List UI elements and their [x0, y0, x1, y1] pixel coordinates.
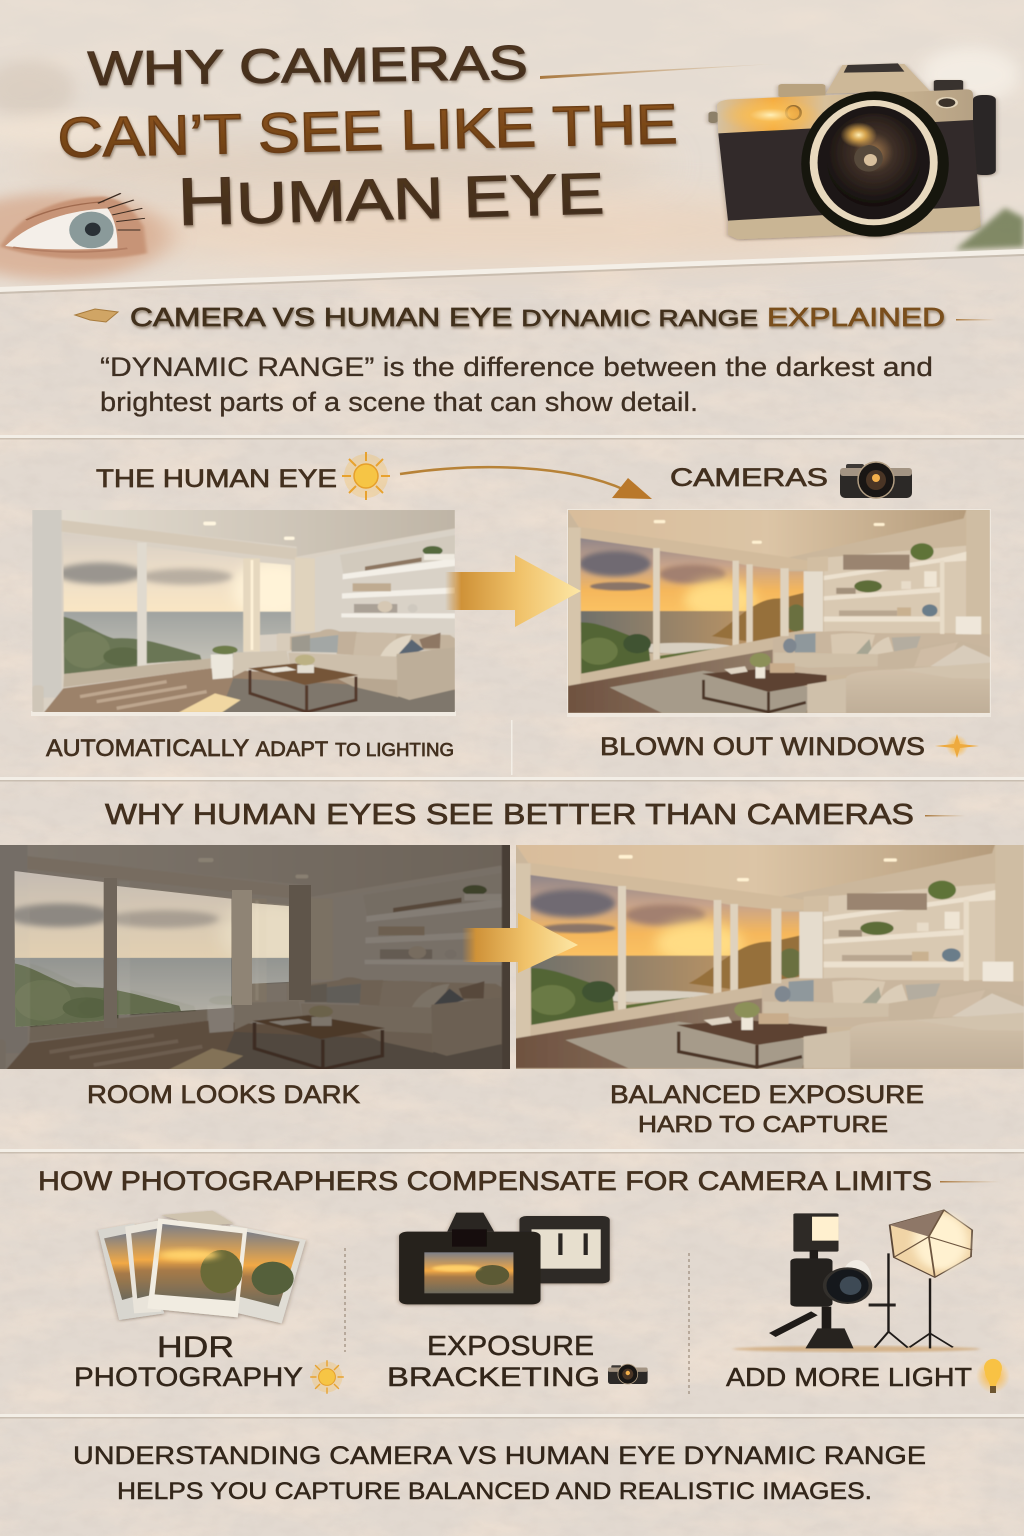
- section: eye vs camera: [31, 452, 991, 762]
- caption: HDR photography: [74, 1331, 303, 1392]
- photo: balanced exposure: [512, 840, 1024, 1080]
- header section: [0, 37, 1024, 280]
- caption: exposure bracketing: [387, 1330, 600, 1392]
- heading line: [940, 1181, 1000, 1182]
- title: CAN’T SEE LIKE THE: [57, 92, 678, 169]
- icon: camera: [608, 1364, 648, 1384]
- arrow: [462, 913, 578, 973]
- arrow: [445, 555, 581, 627]
- subtitle line: [956, 319, 996, 320]
- closing statement: [73, 1442, 926, 1505]
- description text: “DYNAMIC RANGE” is the difference between the darkest and: [100, 352, 933, 382]
- subtitle: CAMERA VS HUMAN EYE DYNAMIC RANGE EXPLAINED: [130, 302, 945, 332]
- caption: exposure bracketing: EXPOSURE: [427, 1330, 594, 1361]
- title: HUMAN EYE: [176, 153, 605, 240]
- heading line: [925, 815, 965, 816]
- icon: lighting kit: [733, 1210, 980, 1352]
- icon: camera: [709, 63, 996, 239]
- icon: human eye: [0, 193, 170, 280]
- title: WHY CAMERAS: [87, 37, 528, 96]
- section divider strip: [0, 435, 1024, 440]
- caption: room dark: ROOM LOOKS DARK: [87, 1081, 360, 1109]
- icon: bracketing camera: [399, 1213, 610, 1304]
- icon: HDR photo stack: [98, 1211, 306, 1323]
- section divider strip: [0, 1414, 1024, 1418]
- section divider strip: [0, 1149, 1024, 1154]
- section: dynamic range intro: [75, 302, 996, 417]
- photo: camera view: [565, 506, 991, 724]
- section: why eyes see better: [0, 799, 1024, 1137]
- section divider strip: [0, 777, 1024, 782]
- icon: burst: [935, 734, 979, 758]
- caption: HDR photography: HDR: [157, 1331, 234, 1364]
- closing statement: UNDERSTANDING CAMERA VS HUMAN EYE DYNAMIC RANGE: [73, 1442, 926, 1470]
- caption: balanced: BALANCED EXPOSURE: [610, 1081, 924, 1109]
- closing statement: HELPS YOU CAPTURE BALANCED AND REALISTIC IMAGES.: [117, 1478, 872, 1505]
- icon: sun: [342, 452, 390, 500]
- section: how photographers compensate: [38, 1166, 1010, 1394]
- caption: blown out: BLOWN OUT WINDOWS: [600, 733, 925, 761]
- photo: dark room: [0, 844, 510, 1071]
- label: the human eye: THE HUMAN EYE: [96, 465, 337, 493]
- caption: add more light: ADD MORE LIGHT: [726, 1362, 972, 1392]
- icon: light bulb: [976, 1359, 1010, 1393]
- dashed separators: [345, 1248, 689, 1394]
- heading: WHY HUMAN EYES SEE BETTER THAN CAMERAS: [105, 799, 914, 831]
- title: [57, 37, 678, 240]
- description text: [100, 352, 933, 417]
- section divider strip: [0, 249, 1024, 294]
- description text: brightest parts of a scene that can show detail.: [100, 387, 698, 417]
- photo: human eye view: [31, 509, 456, 716]
- caption: exposure bracketing: BRACKETING: [387, 1362, 600, 1392]
- palm foliage: [955, 208, 1024, 250]
- caption: HDR photography: PHOTOGRAPHY: [74, 1362, 303, 1392]
- label: cameras: CAMERAS: [670, 464, 828, 492]
- caption: balanced: [610, 1081, 924, 1137]
- heading: HOW PHOTOGRAPHERS COMPENSATE FOR CAMERA LIMITS: [38, 1166, 932, 1196]
- icon: camera: [840, 462, 912, 498]
- caption: balanced: HARD TO CAPTURE: [638, 1111, 888, 1137]
- icon: sun: [310, 1360, 344, 1394]
- title accent line: [540, 63, 790, 79]
- icon: small wing: [75, 309, 118, 322]
- curved arrow: [400, 467, 652, 499]
- caption: adapt: AUTOMATICALLY ADAPT TO LIGHTING: [46, 735, 454, 762]
